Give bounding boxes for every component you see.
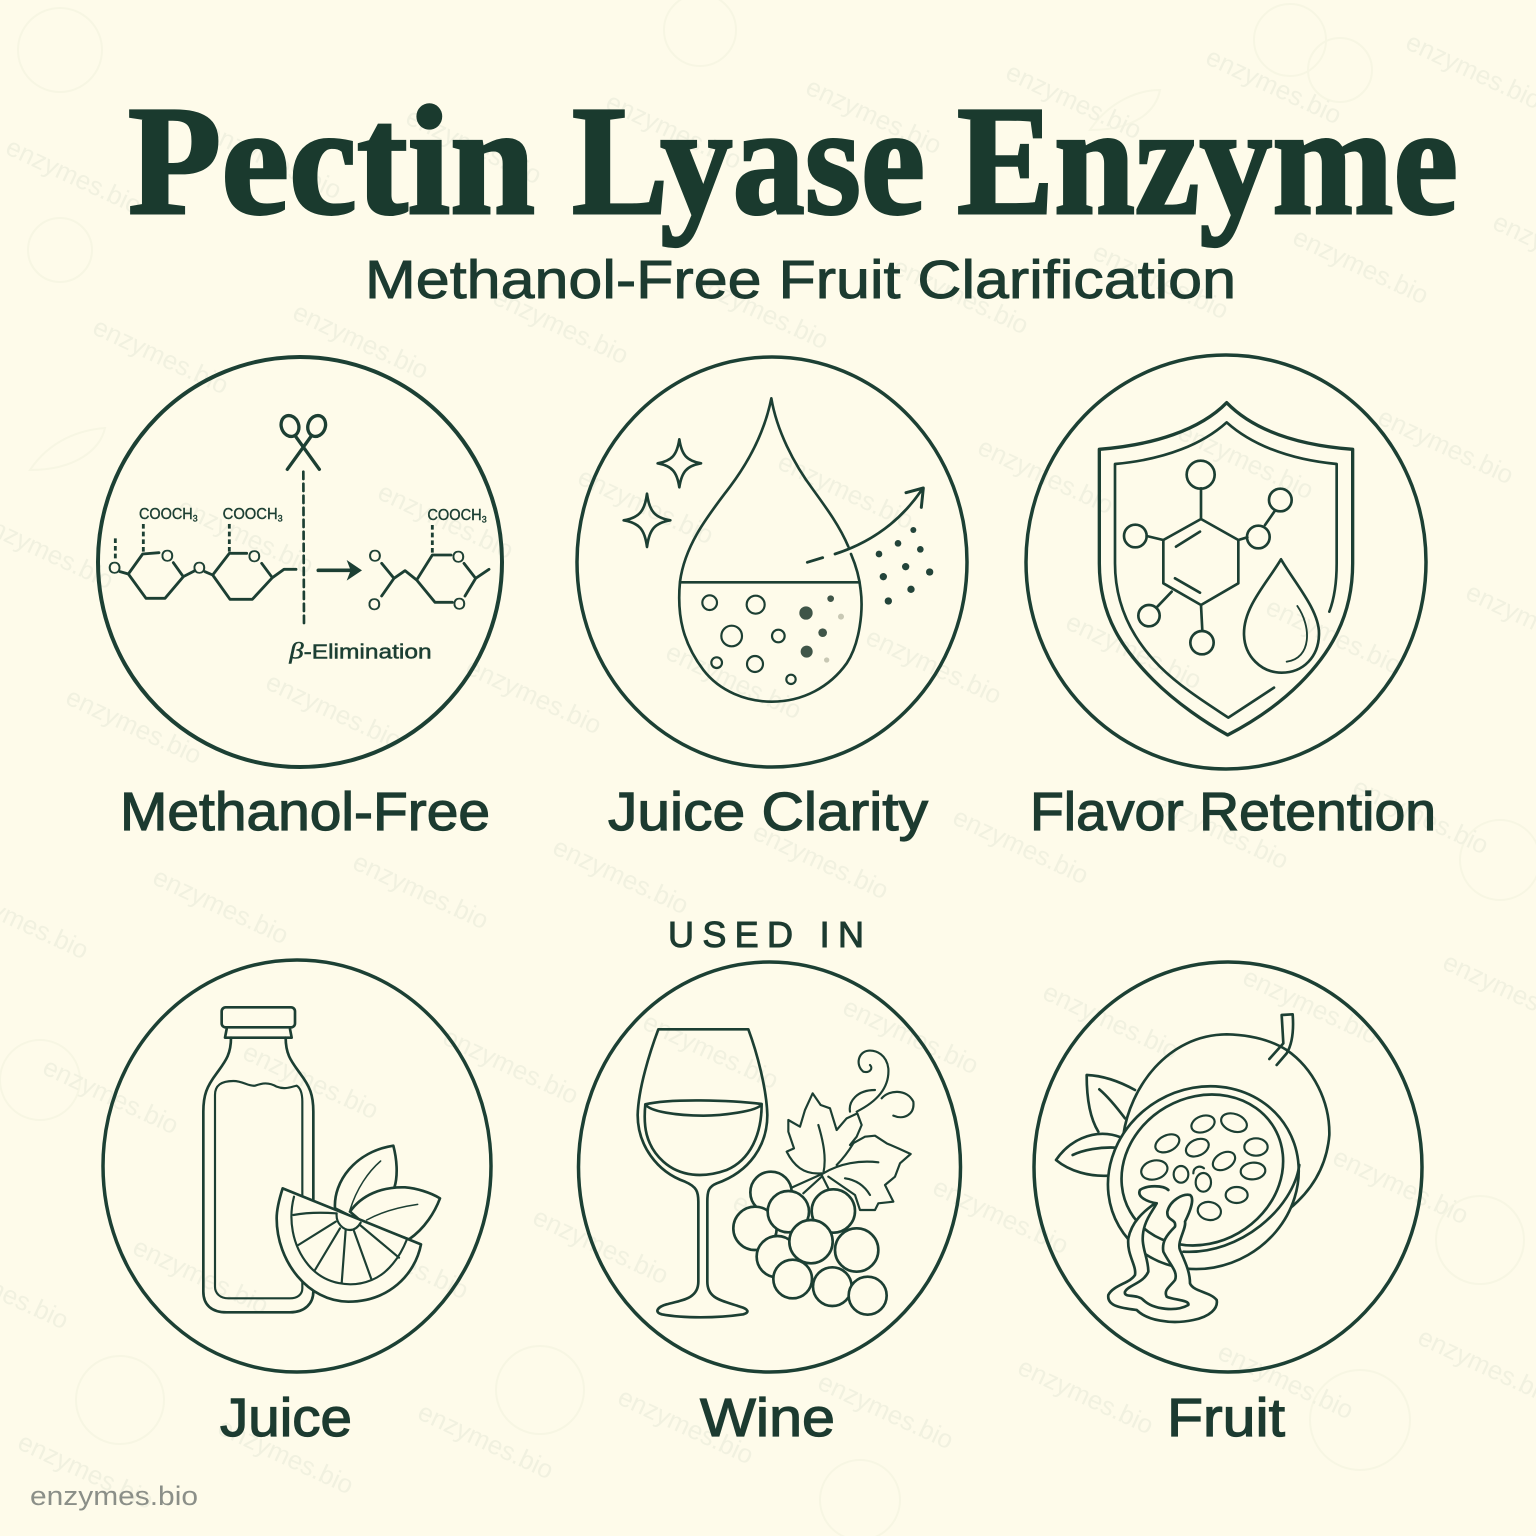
- circle frame: juice clarity: [577, 357, 967, 767]
- text: enzymes.bio: [373, 476, 518, 565]
- grapes: [733, 1172, 887, 1315]
- text: enzymes.bio: [928, 1171, 1073, 1260]
- panel: flavor retention: [1026, 355, 1436, 842]
- grapevine leaves: [787, 1051, 913, 1210]
- text: enzymes.bio: [688, 266, 833, 355]
- text: enzymes.bio: [1348, 771, 1493, 860]
- text: enzymes.bio: [1201, 41, 1346, 130]
- text: enzymes.bio: [638, 1006, 783, 1095]
- text: enzymes.bio: [288, 296, 433, 385]
- text: enzymes.bio: [173, 491, 318, 580]
- chemical labels: [108, 506, 487, 614]
- chemical labels: O: [108, 558, 121, 577]
- text: enzymes.bio: [528, 1201, 673, 1290]
- text: enzymes.bio: [348, 846, 493, 935]
- wine glass: [638, 1029, 767, 1317]
- title: Enzyme: [957, 74, 1458, 247]
- text: enzymes.bio: [1013, 1351, 1158, 1440]
- title: [128, 74, 1458, 247]
- icon: scissors: [278, 413, 328, 469]
- cleavage dashed line: [299, 472, 308, 626]
- label: wine: Wine: [700, 1388, 835, 1448]
- removed particles: [876, 527, 933, 605]
- clear bubbles: [702, 595, 796, 684]
- circle frame: wine: [578, 962, 960, 1372]
- label: methanol-free: Methanol-Free: [120, 782, 490, 842]
- label: fruit: Fruit: [1167, 1388, 1285, 1448]
- text: enzymes.bio: [1328, 1141, 1473, 1230]
- seeds: [1139, 1110, 1268, 1222]
- label: juice clarity: Juice Clarity: [608, 782, 928, 842]
- circle frame: juice: [103, 960, 491, 1372]
- text: enzymes.bio: [328, 1216, 473, 1305]
- icon: clarifying drop: [624, 398, 933, 702]
- chemical labels: O: [248, 547, 261, 566]
- panel: fruit: [1034, 962, 1422, 1448]
- suspended particles: [799, 595, 844, 663]
- molecule: [1124, 461, 1292, 654]
- title: Lyase: [572, 74, 925, 247]
- circle frame: flavor retention: [1026, 355, 1426, 769]
- arrow out of drop: [807, 488, 923, 562]
- text: enzymes.bio: [1, 131, 146, 220]
- text: enzymes.bio: [1173, 416, 1318, 505]
- text: enzymes.bio: [661, 636, 806, 725]
- text: enzymes.bio: [148, 861, 293, 950]
- text: enzymes.bio: [548, 831, 693, 920]
- text: enzymes.bio: [861, 621, 1006, 710]
- icon: beta-elimination chemistry: [108, 413, 489, 664]
- text: enzymes.bio: [973, 431, 1118, 520]
- watermark: enzymes.bio: enzymes.bio: [30, 1481, 198, 1511]
- chemical labels: 3: [482, 515, 487, 525]
- chemical labels: O: [452, 547, 465, 566]
- juice pour: [1108, 1186, 1217, 1322]
- sparkles: [624, 439, 701, 547]
- heading: used in: USED IN: [668, 914, 864, 955]
- text: enzymes.bio: [413, 1396, 558, 1485]
- circle frame: methanol-free: [98, 357, 502, 767]
- whole fruit and stem: [1123, 1014, 1329, 1208]
- chemical labels: O: [161, 546, 174, 565]
- chemical labels: O: [369, 547, 382, 566]
- text: enzymes.bio: [1373, 401, 1518, 490]
- text: enzymes.bio: [1213, 1336, 1358, 1425]
- icon: passion fruit: [1056, 1014, 1332, 1322]
- chemical labels: 3: [193, 514, 198, 524]
- text: enzymes.bio: [773, 446, 918, 535]
- text: enzymes.bio: [801, 71, 946, 160]
- text: enzymes.bio: [748, 816, 893, 905]
- text: enzymes.bio: [1288, 221, 1433, 310]
- text: enzymes.bio: [613, 1381, 758, 1470]
- panel: juice: [103, 960, 491, 1448]
- panel: juice clarity: [577, 357, 967, 842]
- text: enzymes.bio: [38, 1051, 183, 1140]
- shield: [1099, 403, 1353, 735]
- label: beta-elimination: β-Elimination: [288, 638, 432, 664]
- text: enzymes.bio: [1038, 976, 1183, 1065]
- panel: methanol-free: [98, 357, 502, 842]
- text: enzymes.bio: [61, 681, 206, 770]
- icon: wine glass and grapes: [638, 1029, 913, 1317]
- text: enzymes.bio: [201, 116, 346, 205]
- text: enzymes.bio: [13, 1426, 158, 1515]
- citrus slice: [277, 1188, 421, 1302]
- text: enzymes.bio: [238, 1036, 383, 1125]
- text: enzymes.bio: [128, 1231, 273, 1320]
- chemical labels: O: [193, 558, 206, 577]
- icon: bottle with citrus: [203, 1007, 440, 1312]
- text: enzymes.bio: [261, 666, 406, 755]
- chemical labels: COOCH: [223, 506, 280, 523]
- text: enzymes.bio: [888, 251, 1033, 340]
- text: enzymes.bio: [488, 281, 633, 370]
- chemical labels: 3: [278, 514, 283, 524]
- waterline: [682, 578, 859, 586]
- leaves: [1056, 1075, 1135, 1176]
- text: enzymes.bio: [813, 1366, 958, 1455]
- text: enzymes.bio: [728, 1186, 873, 1275]
- circle frame: fruit: [1034, 962, 1422, 1372]
- drop outline: [679, 398, 862, 702]
- text: enzymes.bio: [213, 1411, 358, 1500]
- flavor drop: [1244, 559, 1319, 673]
- leaves: [335, 1146, 440, 1239]
- text: enzymes.bio: [88, 311, 233, 400]
- text: enzymes.bio: [1238, 961, 1383, 1050]
- chemical labels: O: [453, 594, 466, 613]
- cut half: [1074, 1052, 1332, 1304]
- subtitle: Methanol-Free Fruit Clarification: [365, 250, 1236, 310]
- icon: shield with molecule and drop: [1099, 403, 1353, 735]
- text: enzymes.bio: [461, 651, 606, 740]
- text: enzymes.bio: [1001, 56, 1146, 145]
- text: enzymes.bio: [1148, 786, 1293, 875]
- bottle: [203, 1007, 313, 1312]
- text: enzymes.bio: [573, 461, 718, 550]
- text: enzymes.bio: [838, 991, 983, 1080]
- text: enzymes.bio: [401, 101, 546, 190]
- chemical labels: O: [368, 595, 381, 614]
- chemical labels: COOCH: [139, 506, 196, 523]
- text: enzymes.bio: [1061, 606, 1206, 695]
- label: juice: Juice: [220, 1388, 352, 1448]
- text: enzymes.bio: [1128, 1156, 1273, 1245]
- pectin chain: [115, 524, 489, 602]
- text: enzymes.bio: [1088, 236, 1233, 325]
- chemical labels: COOCH: [427, 507, 484, 524]
- text: enzymes.bio: [948, 801, 1093, 890]
- label: flavor retention: Flavor Retention: [1030, 782, 1436, 842]
- panel: wine: [578, 962, 960, 1448]
- title: Pectin: [128, 74, 535, 247]
- text: enzymes.bio: [1261, 591, 1406, 680]
- reaction arrow: [318, 560, 362, 581]
- text: enzymes.bio: [438, 1021, 583, 1110]
- text: enzymes.bio: [601, 86, 746, 175]
